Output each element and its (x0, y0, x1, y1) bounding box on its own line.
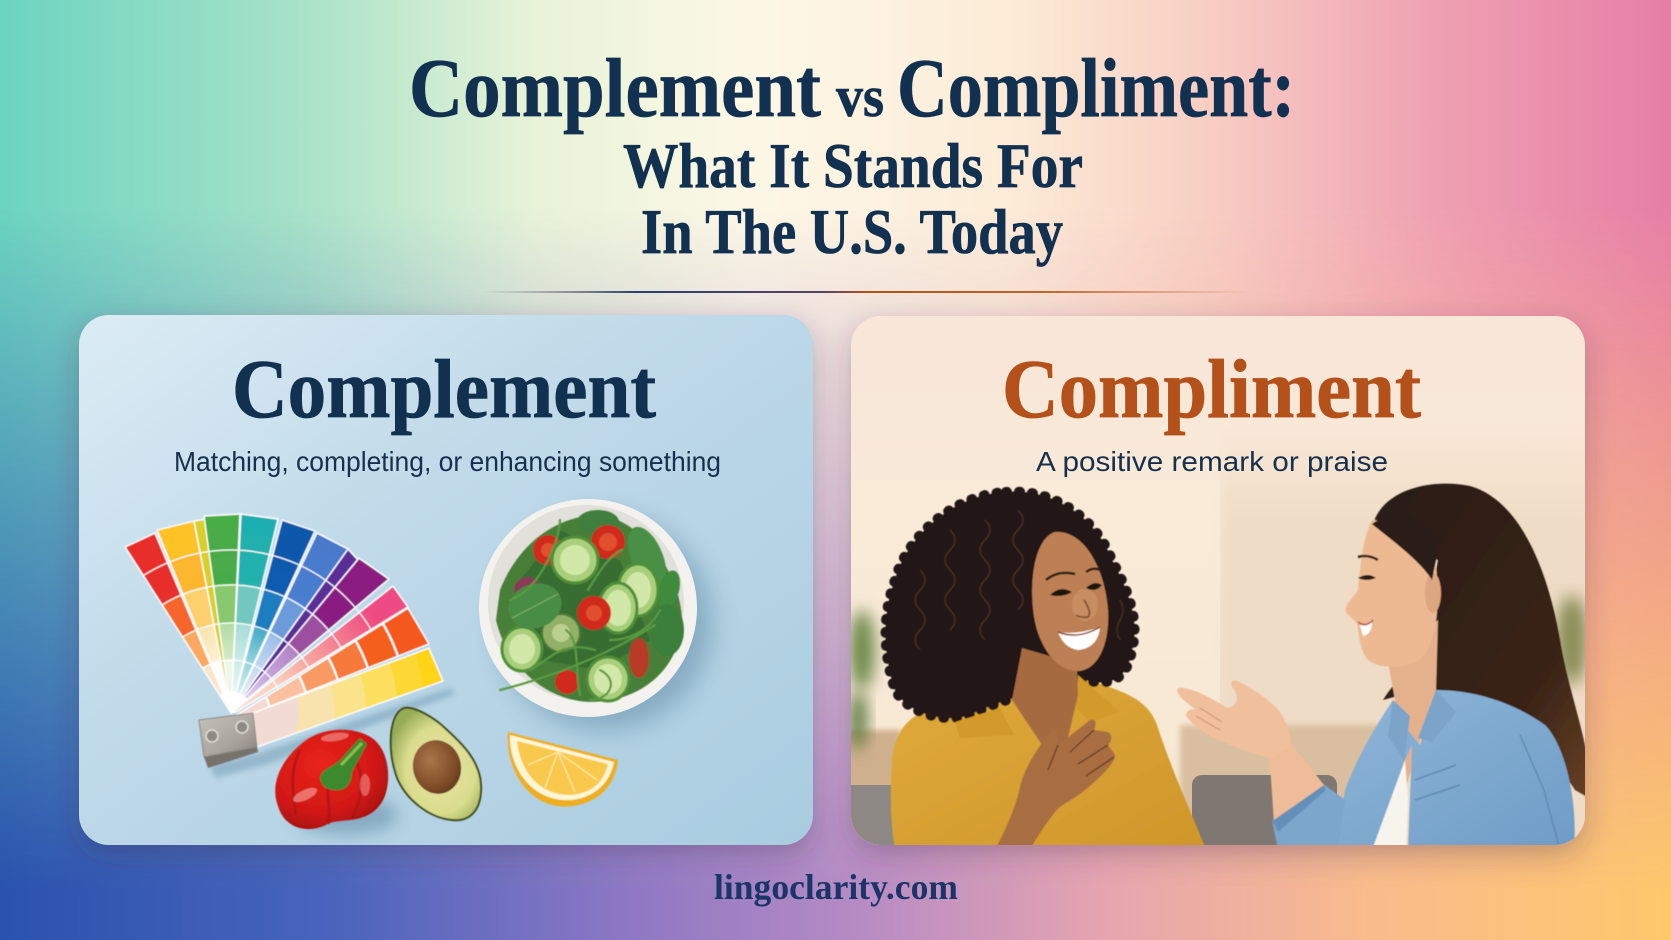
icon: colour swatch fan (124, 512, 455, 779)
curly hair (886, 492, 1135, 718)
title line 3: In The U.S. Today (641, 196, 1063, 267)
title line 1: Complement (409, 42, 821, 135)
panel: compliment (845, 316, 1595, 850)
title divider (482, 291, 1249, 293)
icon: avocado half (391, 708, 481, 820)
panel heading: complement: Complement (232, 343, 656, 436)
woman with long hair and denim jacket (1177, 484, 1592, 850)
title line 1: Compliment: (897, 42, 1295, 135)
icon: salad bowl (479, 499, 712, 730)
gesturing hand and forearm (1177, 680, 1324, 820)
white top (1373, 760, 1408, 845)
panel subtitle: complement: Matching, completing, or enhancing something (174, 446, 721, 477)
denim jacket (1272, 690, 1575, 850)
panel: complement (68, 315, 813, 876)
title line 1 (409, 42, 1295, 135)
face (1346, 520, 1438, 667)
panel subtitle: compliment: A positive remark or praise (1036, 446, 1388, 477)
avocado pit (408, 736, 466, 798)
title (409, 42, 1295, 267)
face (1032, 532, 1108, 671)
neck (1388, 620, 1438, 790)
neck (1012, 647, 1078, 746)
collar (955, 675, 1120, 738)
shirt: mustard (891, 675, 1206, 850)
panel heading: compliment: Compliment (1002, 343, 1421, 436)
hand on chest (995, 720, 1115, 850)
title line 2: What It Stands For (623, 130, 1083, 201)
photo: two women talking (851, 468, 1585, 845)
icon: red bell pepper (275, 730, 398, 835)
metal clasp (199, 713, 258, 768)
footer website: lingoclarity.com (714, 867, 958, 907)
woman with curly hair (886, 492, 1206, 850)
title line 1: vs (836, 64, 884, 129)
jacket sleeve (1272, 783, 1345, 850)
photo background room (851, 468, 1585, 845)
icon: lemon wedge (508, 732, 618, 807)
